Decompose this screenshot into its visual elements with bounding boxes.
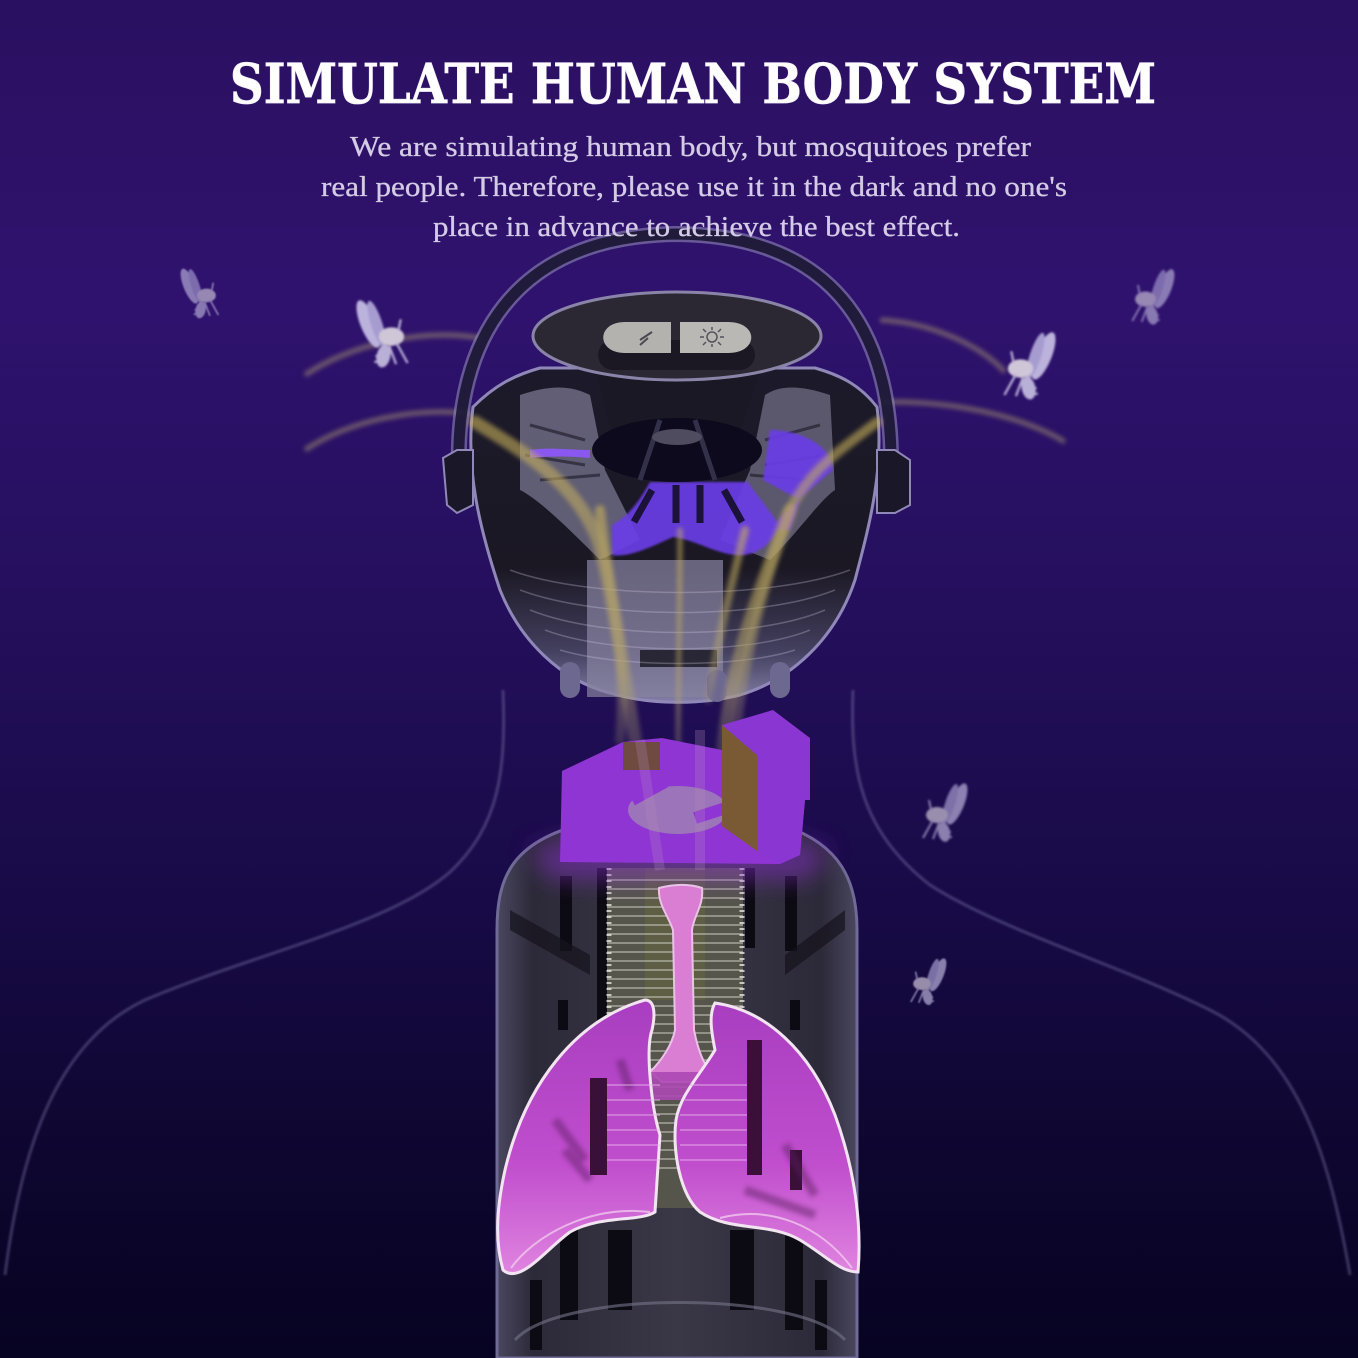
body text: We are simulating human body, but mosquitoes prefer <box>350 132 1032 163</box>
mosquito 4 <box>1004 329 1060 401</box>
body text: real people. Therefore, please use it in the dark and no one's <box>321 172 1067 203</box>
mosquito 5 <box>923 781 972 843</box>
mosquito 6 <box>911 956 950 1006</box>
top cap <box>533 292 821 380</box>
grey fan fins <box>520 388 835 560</box>
mosquitoes <box>177 267 1178 1006</box>
mosquito 1 <box>177 267 218 319</box>
connector block <box>722 710 810 864</box>
slats <box>530 868 827 1350</box>
button: light <box>680 322 751 353</box>
uv purple light <box>530 430 833 555</box>
left lung <box>498 1000 660 1274</box>
feet <box>570 672 780 692</box>
right lung <box>675 1003 859 1272</box>
body text <box>321 132 1067 243</box>
lower cylinder housing <box>497 826 857 1358</box>
coil <box>607 868 743 1208</box>
product: lamp head <box>443 234 910 702</box>
body silhouette outline <box>5 690 1350 1275</box>
bowl body <box>471 368 879 702</box>
carry handle <box>459 234 891 470</box>
circuit plate <box>530 710 830 880</box>
body text: place in advance to achieve the best effect. <box>433 212 960 243</box>
lower drum <box>510 560 850 697</box>
scent waves <box>305 320 1065 450</box>
scent streams <box>475 422 877 780</box>
bronchi <box>640 1072 722 1100</box>
mosquito 3 <box>1132 267 1178 326</box>
handle clips <box>443 450 910 513</box>
trachea <box>650 885 712 1082</box>
center funnel <box>592 372 762 482</box>
button: mosquito <box>603 322 671 353</box>
lungs <box>498 885 859 1274</box>
mosquito 2 <box>352 297 408 369</box>
title: SIMULATE HUMAN BODY SYSTEM <box>230 51 1156 116</box>
